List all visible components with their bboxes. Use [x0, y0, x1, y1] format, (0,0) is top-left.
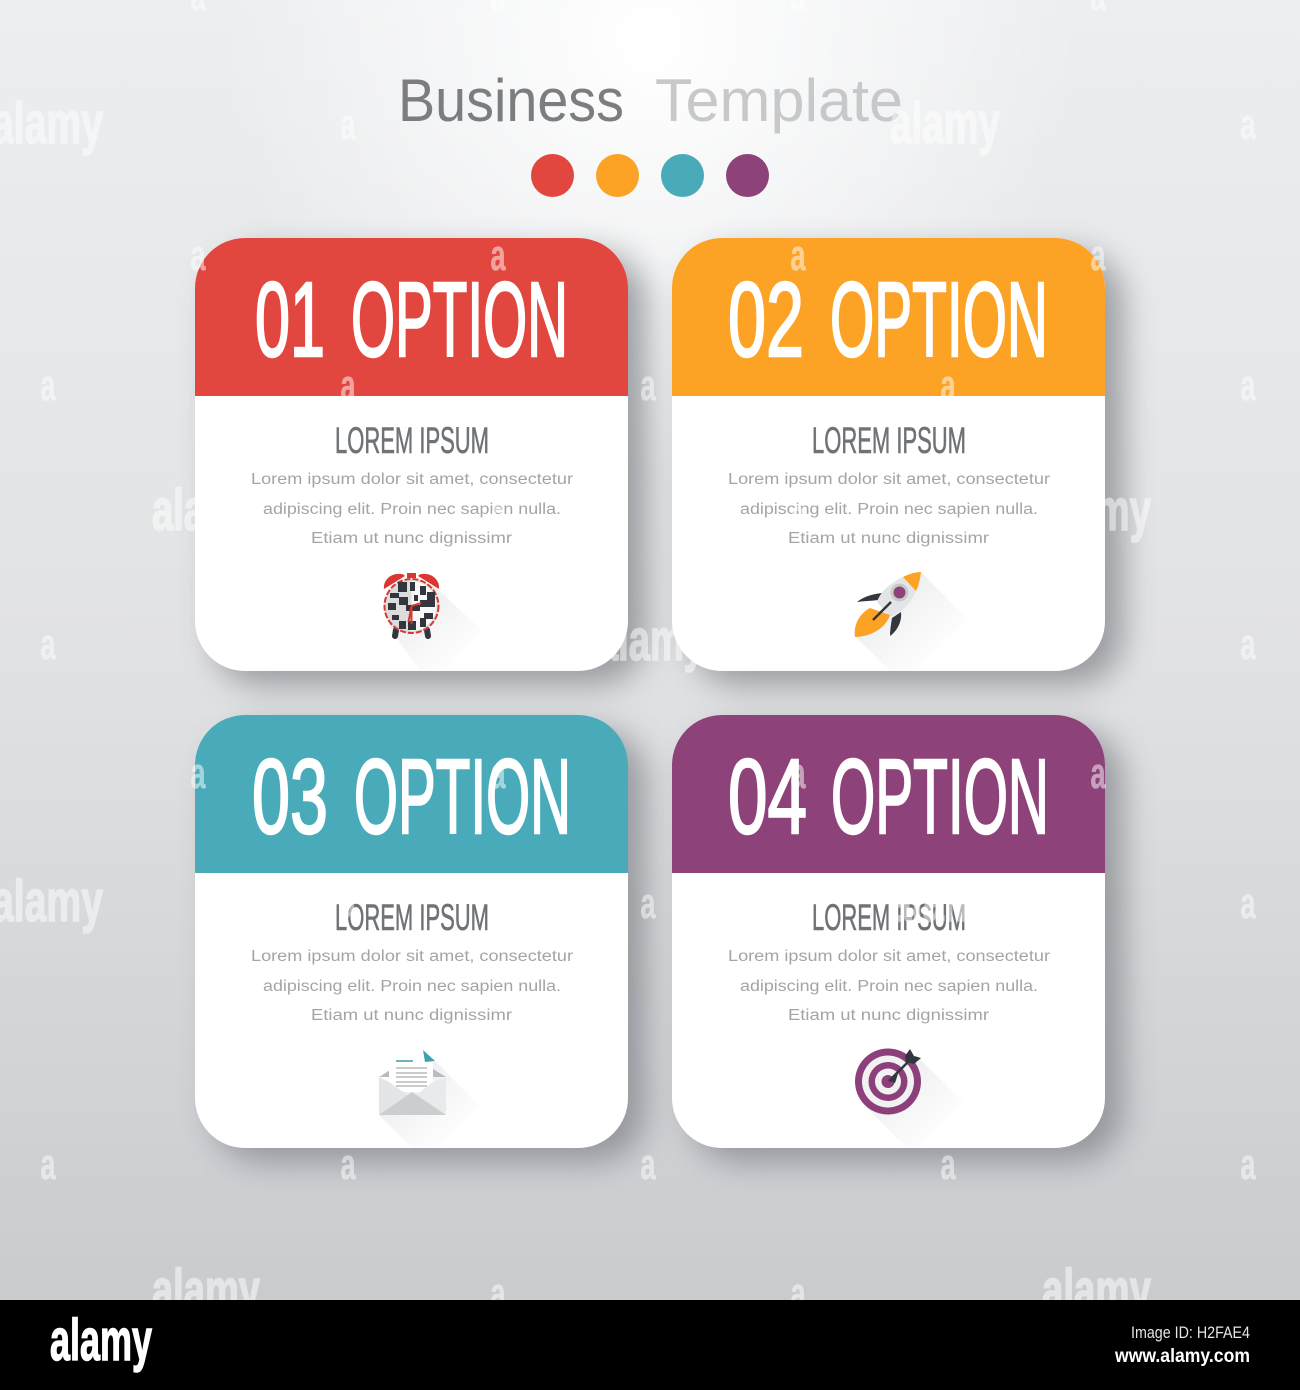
- watermarks: a: [790, 491, 806, 540]
- watermarks: a: [190, 749, 206, 798]
- watermarks: alamy: [152, 478, 260, 543]
- watermarks: a: [640, 1140, 656, 1189]
- panel: 02 option: [672, 238, 1105, 671]
- heading 01: [255, 261, 568, 379]
- body text 02: adipiscing elit. Proin nec sapien nulla.: [740, 501, 1038, 518]
- watermarks: a: [1090, 749, 1106, 798]
- watermarks: a: [190, 231, 206, 280]
- footer logo: alamy: [50, 1308, 152, 1373]
- card header 04: [672, 715, 1105, 873]
- watermarks: a: [1090, 231, 1106, 280]
- watermarks: a: [490, 491, 506, 540]
- watermarks: a: [640, 879, 656, 928]
- watermarks: alamy: [1042, 478, 1151, 543]
- watermarks: a: [940, 1140, 956, 1189]
- watermarks: a: [1240, 620, 1256, 669]
- watermarks: a: [640, 361, 656, 410]
- watermarks: alamy: [1042, 1258, 1151, 1323]
- heading 03: OPTION: [354, 738, 571, 856]
- body text 04: Etiam ut nunc dignissimr: [788, 1007, 989, 1024]
- watermarks: a: [1240, 361, 1256, 410]
- watermarks: a: [940, 361, 956, 410]
- body text 04: adipiscing elit. Proin nec sapien nulla.: [740, 978, 1038, 995]
- heading 04: OPTION: [831, 738, 1049, 856]
- watermarks: a: [1240, 100, 1256, 149]
- panel: 01 option: [195, 238, 628, 671]
- watermarks: alamy: [890, 869, 1000, 934]
- website: www.alamy.com: [1114, 1346, 1250, 1367]
- panel: 03 option: [195, 715, 628, 1148]
- heading 04: [728, 738, 1049, 856]
- icon: envelope: [379, 1050, 480, 1148]
- subheading 02: LOREM IPSUM: [812, 420, 966, 461]
- subheading 03: LOREM IPSUM: [335, 897, 489, 938]
- watermarks: a: [790, 749, 806, 798]
- body text 01: Lorem ipsum dolor sit amet, consectetur: [251, 471, 573, 488]
- body text 04: [728, 948, 1050, 1024]
- heading 02: 02: [728, 261, 804, 379]
- body text 01: [251, 471, 573, 547]
- watermarks: alamy: [890, 91, 1000, 156]
- body text 01: Etiam ut nunc dignissimr: [311, 530, 512, 547]
- watermarks: a: [940, 620, 956, 669]
- title: Business: [398, 67, 624, 134]
- body text 01: adipiscing elit. Proin nec sapien nulla.: [263, 501, 561, 518]
- watermarks: a: [1240, 879, 1256, 928]
- watermarks: a: [340, 1140, 356, 1189]
- title: [398, 67, 903, 134]
- title: Template: [655, 67, 903, 134]
- body text 03: Lorem ipsum dolor sit amet, consectetur: [251, 948, 573, 965]
- body text 02: Lorem ipsum dolor sit amet, consectetur: [728, 471, 1050, 488]
- heading 01: OPTION: [351, 261, 568, 379]
- body text 03: adipiscing elit. Proin nec sapien nulla.: [263, 978, 561, 995]
- heading 01: 01: [255, 261, 325, 379]
- icon: rocket: [855, 572, 968, 671]
- card header 02: [672, 238, 1105, 396]
- body text 02: [728, 471, 1050, 547]
- watermarks: a: [340, 100, 356, 149]
- footer bar: [0, 1300, 1300, 1390]
- watermarks: a: [40, 361, 56, 410]
- watermarks: a: [340, 620, 356, 669]
- heading 04: 04: [728, 738, 807, 856]
- image id: Image ID: H2FAE4: [1131, 1323, 1250, 1342]
- heading 02: [728, 261, 1048, 379]
- watermarks: a: [40, 620, 56, 669]
- subheading 04: LOREM IPSUM: [812, 897, 966, 938]
- watermarks: a: [790, 231, 806, 280]
- icon: target: [855, 1048, 964, 1148]
- heading 03: [252, 738, 571, 856]
- body text 03: [251, 948, 573, 1024]
- card header 01: [195, 238, 628, 396]
- watermarks: a: [790, 1269, 806, 1318]
- colour dots: [531, 154, 769, 197]
- watermarks: a: [40, 1140, 56, 1189]
- card header 03: [195, 715, 628, 873]
- heading 02: OPTION: [830, 261, 1048, 379]
- watermarks: a: [340, 361, 356, 410]
- body text 03: Etiam ut nunc dignissimr: [311, 1007, 512, 1024]
- watermarks: alamy: [597, 608, 705, 673]
- watermarks: a: [490, 749, 506, 798]
- body text 04: Lorem ipsum dolor sit amet, consectetur: [728, 948, 1050, 965]
- subheading 01: LOREM IPSUM: [335, 420, 489, 461]
- icon: alarm clock: [384, 573, 484, 671]
- body text 02: Etiam ut nunc dignissimr: [788, 530, 989, 547]
- watermarks: a: [340, 879, 356, 928]
- watermarks: a: [1240, 1140, 1256, 1189]
- watermarks: a: [490, 231, 506, 280]
- heading 03: 03: [252, 738, 328, 856]
- panel: 04 option: [672, 715, 1105, 1148]
- card shadows: [213, 252, 1123, 1162]
- watermarks: alamy: [152, 1258, 260, 1323]
- watermarks: a: [490, 1269, 506, 1318]
